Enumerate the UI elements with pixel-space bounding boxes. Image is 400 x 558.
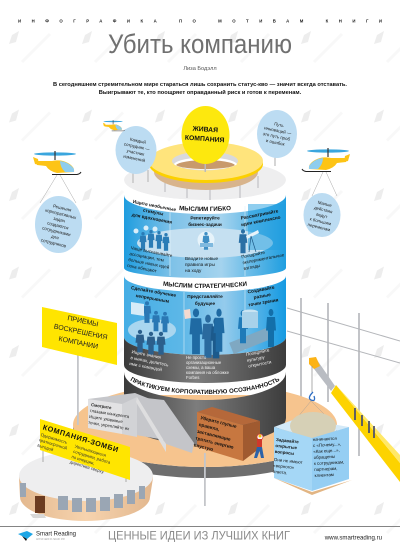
- balloon: corporate decisions: создаются: [47, 220, 70, 231]
- badge: living company: КОМПАНИЯ: [185, 135, 225, 144]
- blue crate: open questions: к сотрудникам,: [314, 459, 344, 466]
- sign: zombie company: Одержимость: [40, 432, 69, 445]
- footer url: www.smartreading.ru: [324, 534, 382, 542]
- sign: zombie company: краткосрочной: [38, 437, 68, 451]
- strategic panel: imagine future: будущее: [195, 300, 215, 306]
- blue crate: open questions: начинаются: [313, 436, 338, 442]
- flexible panel: experimental views: [241, 245, 286, 271]
- blue crate: open questions: с «Почему...»,: [313, 442, 341, 448]
- flexible panel: experimental views: экспериментальные: [242, 252, 285, 265]
- strategic panel: share knowledge: ими с командой: [129, 360, 163, 372]
- sign: zombie company: директива сверху: [69, 459, 105, 475]
- people: imagining the future: [184, 308, 224, 358]
- strategic panel: share knowledge: [129, 349, 171, 373]
- footer logo: [18, 531, 76, 541]
- flexible panel: seek stimuli: для вдохновения: [131, 212, 173, 225]
- flexible panel: view holistically: [239, 207, 281, 227]
- strategic panel: viewpoints: Создавайте: [247, 284, 275, 294]
- flexible panel: view holistically: Рассматривайте: [240, 207, 279, 221]
- sign: zombie company: по инерции,: [71, 454, 95, 466]
- flexible panel: experimental views: Поощряйте: [241, 249, 266, 259]
- balloon: path of innovation: и ошибок: [265, 138, 285, 147]
- strategic panel: openness: открытости: [248, 359, 272, 369]
- concrete block: competitor view: глазами конкурента: [90, 408, 130, 419]
- strategic panel: forbes: организационные: [186, 360, 222, 365]
- sign: revival techniques: КОМПАНИИ: [58, 336, 99, 351]
- balloon: small actions: Малые: [317, 200, 333, 208]
- balloon: small actions: [304, 193, 340, 237]
- right helicopter: [302, 148, 350, 172]
- people: different viewpoints: [238, 309, 276, 347]
- concrete block: competitor view: [88, 393, 194, 453]
- balloon: every employee: [116, 126, 156, 183]
- left helicopter: [33, 151, 81, 174]
- strategic panel: imagine future: Представляйте: [187, 293, 223, 299]
- sign: zombie company: КОМПАНИЯ-ЗОМБИ: [42, 423, 120, 454]
- strategic panel: openness: культуру: [247, 354, 266, 363]
- flexible panel: seek stimuli: [130, 198, 177, 225]
- flexible panel: new rules: Вводите новые: [185, 256, 218, 261]
- flexible panel: view holistically: идеи комплексно: [241, 215, 281, 227]
- strategic panel: share knowledge: в книгах, делитесь: [130, 355, 170, 368]
- flexible panel: rehearse: [188, 214, 222, 227]
- flexible panel: new rules: на ходу: [185, 268, 202, 273]
- balloon: path of innovation: инноваций —: [264, 125, 292, 136]
- strategic panel: forbes: Forbes: [186, 375, 199, 380]
- blue crate: open questions: партнерам,: [314, 466, 338, 472]
- balloon: small actions: ведут: [316, 212, 328, 219]
- sign: revival techniques: ПРИЕМЫ: [67, 315, 99, 328]
- balloon: corporate decisions: Решения: [52, 203, 73, 213]
- badge: living company: [182, 106, 230, 164]
- flexible panel: seek stimuli: стимулы: [143, 208, 164, 216]
- strategic panel: continuous learning: [130, 284, 177, 305]
- sign: zombie company: Увольняющиеся: [74, 444, 107, 458]
- strategic panel: forbes: [186, 355, 230, 380]
- balloon: every employee: сотрудник —: [123, 141, 151, 152]
- balloon: path of innovation: это путь проб: [262, 131, 291, 142]
- worker: [254, 434, 264, 458]
- footer slogan: ЦЕННЫЕ ИДЕИ ИЗ ЛУЧШИХ КНИГ: [108, 528, 290, 542]
- footer logo: ценные идеи из лучших книг: [36, 538, 65, 540]
- balloon: corporate decisions: сотрудниками: [42, 225, 72, 237]
- strategic panel: viewpoints: точки зрения: [248, 297, 279, 307]
- sign post: [77, 355, 79, 425]
- flexible panel: associations: пока обещают: [127, 263, 157, 273]
- brick wall: remove stupid rules: [193, 407, 264, 461]
- flexible panel: associations: [127, 244, 174, 276]
- flexible panel: seek stimuli: Ищите необычные: [132, 198, 177, 212]
- flexible panel: associations: больше новых идей: [128, 256, 170, 270]
- strategic panel: forbes: компания на обложке: [186, 370, 230, 375]
- balloon: every employee: Каждый: [130, 137, 147, 145]
- flexible panel: rehearse: Репетируйте: [190, 214, 220, 220]
- people: brainstorm group: [134, 226, 170, 251]
- balloon: corporate decisions: [35, 172, 337, 253]
- balloon: small actions: к большим: [309, 216, 332, 226]
- scaffold behind tower: [287, 298, 400, 456]
- blue crate: open questions: ответа.: [272, 469, 287, 475]
- balloon: path of innovation: Путь: [274, 121, 285, 128]
- tower top surface: [124, 160, 286, 200]
- badge: living company: ЖИВАЯ: [191, 126, 218, 134]
- strategic panel: continuous learning: Сделайте обучение: [131, 284, 177, 298]
- strategic panel: viewpoints: разные: [253, 292, 272, 300]
- strategic panel: openness: Поощряйте: [245, 346, 270, 357]
- intro text: [53, 82, 347, 96]
- flexible panel: experimental views: взгляды: [243, 263, 261, 271]
- dark lower strip: [124, 337, 286, 383]
- brick wall: remove stupid rules: Уберите глупые: [200, 414, 238, 429]
- balloon: path of innovation: [257, 110, 297, 166]
- strategic panel: forbes: схемы, а ваша: [186, 365, 216, 370]
- blue crate: open questions: клиентам: [314, 472, 334, 478]
- panel: think flexibly: [124, 195, 286, 278]
- balloon: corporate decisions: для: [51, 234, 60, 241]
- concrete block: competitor view: Ищите уязвимые: [89, 414, 124, 424]
- strategic panel: forbes: Не просто: [186, 355, 207, 360]
- sign: zombie company: выгодой: [37, 443, 55, 452]
- lower dark section: [124, 372, 286, 445]
- brick wall: remove stupid rules: заставляющие: [197, 429, 232, 442]
- brick wall: remove stupid rules: тратить энергию: [195, 436, 234, 450]
- footer logo: Smart Reading: [36, 532, 76, 538]
- heading: corporate mindfulness: ПРАКТИКУЕМ КОРПОРАТИВНУЮ ОСОЗНАННОСТЬ: [130, 376, 280, 394]
- flexible panel: associations: ассоциации, тем: [129, 251, 164, 263]
- strategic panel: openness: [245, 346, 273, 369]
- concrete block: competitor view: точки, укрепляйте их: [88, 420, 131, 431]
- header kicker: ИНФОГРАФИКА ПО МОТИВАМ КНИГИ: [18, 18, 382, 24]
- strategic panel: viewpoints: [245, 283, 279, 307]
- tower cylinder: [124, 160, 286, 445]
- small helicopter: [103, 120, 125, 131]
- people: rehearsal desk: [198, 232, 214, 250]
- brick wall: remove stupid rules: впустую: [193, 442, 214, 452]
- sign: zombie company: [35, 419, 130, 482]
- person with telescope: [239, 229, 259, 253]
- flexible panel: new rules: правила игры: [185, 262, 215, 267]
- crane: [297, 357, 400, 482]
- sign: zombie company: сотрудники, работа: [73, 449, 112, 465]
- post in front of disc: [204, 453, 206, 506]
- balloon: corporate decisions: сотрудников: [40, 237, 67, 249]
- intro text: В сегодняшнем стремительном мире стараться лишь сохранить статус-кво — значит всегда отставать.: [53, 82, 347, 88]
- stadium roof: [149, 142, 263, 200]
- strategic panel: share knowledge: Ищите знания: [131, 349, 162, 360]
- windows: [20, 483, 145, 512]
- band headings: [124, 193, 286, 211]
- blue crate: open questions: «верного»: [273, 463, 295, 470]
- footer rule: [0, 525, 400, 528]
- flexible panel: associations: Чаще высказывайте: [130, 244, 174, 258]
- heading: think flexibly: МЫСЛИМ ГИБКО: [179, 206, 231, 211]
- zombie company building: [19, 451, 153, 521]
- orange base disc: [73, 383, 337, 478]
- heading: think strategically: МЫСЛИМ СТРАТЕГИЧЕСКИ: [163, 281, 247, 288]
- flexible panel: rehearse: бизнес-задачи: [188, 221, 222, 227]
- sign: revival techniques: [42, 307, 117, 365]
- blue crate: open questions: вопросы: [275, 449, 295, 456]
- sign: revival techniques: ВОСКРЕШЕНИЯ: [53, 323, 108, 342]
- blue crate: open questions: обращены: [314, 454, 335, 460]
- intro text: Выигрывают те, кто поощряет оправданный риск и готов к переменам.: [99, 89, 302, 96]
- balloon: every employee: изменений: [123, 154, 146, 163]
- title: Убить компанию: [108, 29, 292, 59]
- door: [35, 496, 45, 513]
- blue crate: open questions: открытые: [275, 443, 298, 450]
- concrete block: competitor view: Смотрите: [91, 402, 112, 410]
- balloon: corporate decisions: задач: [53, 216, 66, 224]
- balloon: small actions: переменам: [307, 222, 331, 232]
- people: learning team: [131, 301, 169, 355]
- balloon: corporate decisions: корпоративных: [45, 208, 78, 220]
- blue crate: open questions: [272, 412, 352, 495]
- balloon: small actions: действия: [314, 205, 334, 215]
- flexible panel: new rules: [185, 256, 218, 273]
- panel: think strategically: [124, 276, 286, 383]
- author: Лиза Бодэлл: [183, 66, 217, 72]
- balloon: every employee: участник: [126, 148, 145, 157]
- strategic panel: imagine future: [187, 293, 223, 306]
- blue crate: open questions: «Как еще...»,: [313, 448, 340, 454]
- brick wall: remove stupid rules: правила,: [198, 422, 220, 432]
- blue crate: open questions: Они не имеют: [274, 457, 303, 465]
- strategic panel: continuous learning: непрерывным: [135, 293, 170, 304]
- blue crate: open questions: Задавайте: [276, 437, 300, 444]
